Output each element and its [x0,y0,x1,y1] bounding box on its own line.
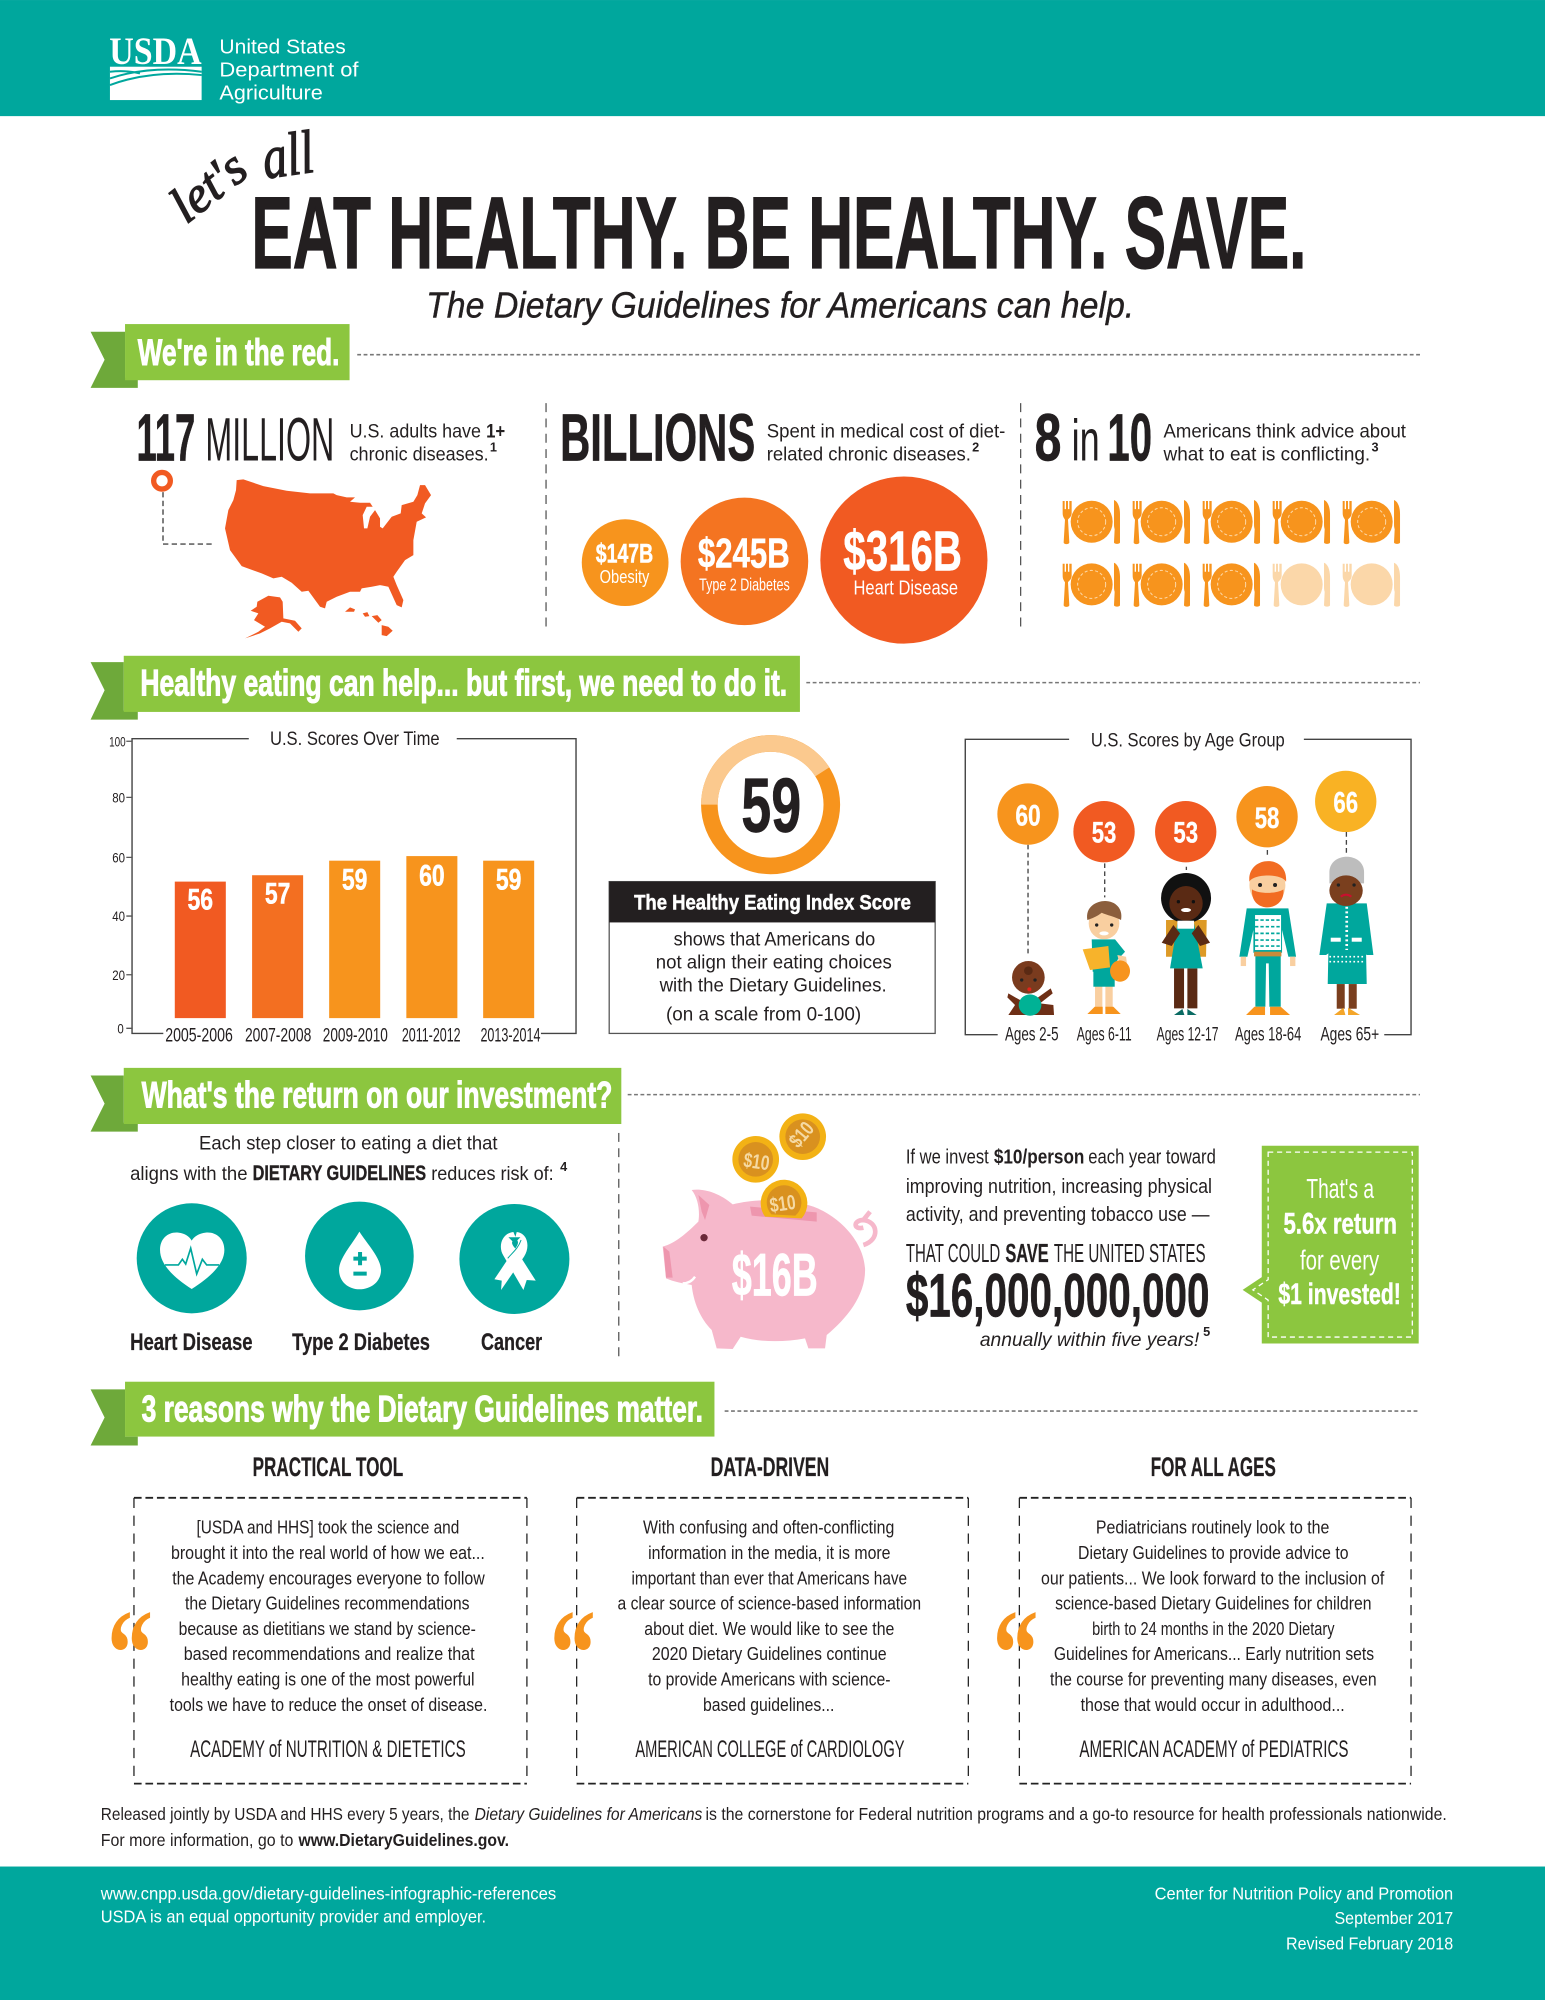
bar 2007-2008: 2007-2008 [245,1026,311,1047]
footer credits: Revised February 2018 [1286,1933,1453,1953]
bar 2013-2014: 2013-2014 [480,1026,541,1047]
score bubble 66: 66 [1333,787,1358,820]
stat: billions: 2 [972,440,979,455]
investment text: THAT COULD [906,1240,1000,1268]
icon labels: Heart Disease [130,1329,253,1356]
quote text: Pediatricians routinely look to the [1096,1517,1329,1538]
age 18-64 man [1239,861,1296,1015]
callout: 5.6x return: $1 invested! [1278,1278,1401,1311]
stat: 8 in 10: 10 [1107,402,1152,476]
coins: $10 [785,1118,819,1152]
risk reduction intro text: Each step closer to eating a diet that [199,1133,498,1155]
quote text: a clear source of science-based information [617,1592,921,1613]
bar chart: U.S. scores over time: U.S. Scores Over Time [270,729,440,750]
quote text: the Dietary Guidelines recommendations [185,1592,469,1613]
quote text: Dietary Guidelines to provide advice to [1078,1542,1349,1563]
quote text: science-based Dietary Guidelines for children [1055,1592,1371,1613]
coins: $10 [742,1149,771,1175]
script title: let's all [159,118,318,234]
stat: 8 in 10: in [1072,409,1100,474]
quote mark: “ [107,1586,153,1724]
footer references [100,1884,556,1927]
age labels [1005,1025,1379,1046]
bar chart: U.S. scores over time [109,729,576,1047]
callout: 5.6x return: for every [1300,1244,1379,1275]
risk reduction intro text: aligns with the [130,1163,248,1185]
quote text: those that would occur in adulthood... [1081,1694,1345,1715]
bubble: type 2 diabetes: $245B [698,530,790,577]
bar 2013-2014 [480,861,541,1047]
bubble: type 2 diabetes [681,498,808,625]
attribution: AMERICAN COLLEGE of CARDIOLOGY [635,1736,905,1763]
bar chart: U.S. scores over time: 100 [109,733,126,749]
age labels: Ages 6-11 [1077,1025,1132,1046]
department name [219,37,359,105]
bar 2009-2010: 2009-2010 [323,1026,388,1047]
score bubble 53 teen [1155,801,1216,862]
panel: for all ages [993,1452,1411,1784]
closing statement: is the cornerstone for Federal nutrition programs and a go-to resource for health professionals nationwide. [706,1804,1447,1824]
script title: let's all: all [258,118,318,193]
bar chart: U.S. scores over time: 0 [117,1020,124,1036]
panel: data-driven [550,1452,968,1784]
divider [545,403,547,630]
quote text: information in the media, it is more [648,1542,891,1563]
bubble: heart disease: Heart Disease [854,578,958,600]
age labels: Ages 12-17 [1157,1025,1219,1046]
stat: 8 in 10: 3 [1371,440,1379,455]
risk reduction intro text: 4 [560,1159,568,1174]
panel: healthy eating index score [609,882,935,1033]
bar 2005-2006 [165,882,233,1047]
quote text: 2020 Dietary Guidelines continue [652,1643,887,1664]
panel: healthy eating index score: (on a scale from 0-100) [666,1004,861,1026]
score bubble 58: 58 [1255,802,1279,835]
age 2-5 baby [1007,961,1054,1016]
callout: 5.6x return: That's a [1306,1173,1374,1204]
stat: billions: related chronic diseases. [767,444,971,466]
section heading: 3 reasons [91,1382,1420,1446]
quote text: to provide Americans with science- [648,1668,891,1689]
quote text: based guidelines... [703,1694,834,1715]
bar 2011-2012: 2011-2012 [402,1026,461,1047]
donut score 59: 59 [741,764,801,849]
age labels: Ages 18-64 [1235,1025,1302,1046]
footer credits: Center for Nutrition Policy and Promotion [1155,1884,1453,1904]
investment text: each year toward [1088,1147,1216,1169]
score bubble 60 [997,783,1059,845]
score bubble 53 child [1073,801,1135,862]
section heading: return on investment: What's the return on our investment? [142,1074,612,1115]
bar 2007-2008: 57 [265,877,290,910]
quote mark: “ [993,1586,1039,1724]
panel: healthy eating index score: not align their eating choices [656,951,892,973]
quote text: Guidelines for Americans... Early nutrition sets [1054,1643,1374,1664]
piggy bank illustration [663,1113,875,1349]
quote text: birth to 24 months in the 2020 Dietary [1092,1618,1335,1639]
age labels: Ages 2-5 [1005,1025,1059,1046]
panel: healthy eating index score: with the Dietary Guidelines. [659,974,887,996]
investment text: SAVE [1005,1240,1049,1268]
bubble: heart disease: $316B [843,519,962,582]
quote text: because as dietitians we stand by science- [179,1618,476,1639]
bar chart: U.S. scores over time: 80 [112,790,125,806]
footer band [0,1867,1545,2000]
department name: Department of [219,60,359,82]
age 65+ woman [1319,857,1373,1015]
bar chart: U.S. scores over time: 20 [112,967,125,983]
stat: billions [560,402,1005,644]
panel: for all ages: FOR ALL AGES [1151,1452,1276,1482]
department name: Agriculture [219,83,323,105]
quote text: based recommendations and realize that [184,1643,475,1664]
score bubble 58 [1236,786,1298,847]
panel: healthy eating index score: The Healthy Eating Index Score [634,890,911,915]
panel: healthy eating index score: shows that Americans do [674,928,875,950]
closing statement: Dietary Guidelines for Americans [475,1804,702,1824]
investment text: improving nutrition, increasing physical [906,1176,1212,1198]
risk reduction intro text [130,1133,568,1185]
pig body [663,1190,865,1349]
coin in slot [761,1180,807,1218]
section heading: return on investment [91,1068,1420,1132]
score bubble 53 teen: 53 [1173,817,1198,850]
bubble: obesity: $147B [596,539,653,569]
quote text: With confusing and often-conflicting [643,1517,894,1538]
icon: blood drop [305,1202,414,1310]
stat: 117 million: 1 [490,440,497,455]
coins [732,1113,826,1183]
bubble: obesity: Obesity [600,566,650,587]
panel: U.S. scores by age group [965,730,1411,1046]
quote text: the Academy encourages everyone to follow [172,1568,485,1589]
coin in slot: $10 [768,1191,797,1217]
stat: 117 million: U.S. adults have [350,421,481,443]
closing statement: www.DietaryGuidelines.gov. [298,1830,509,1850]
subtitle: The Dietary Guidelines for Americans can help. [426,286,1134,326]
stat: 117 million: MILLION [205,406,334,474]
investment text: activity, and preventing tobacco use — [906,1204,1210,1226]
quote text: important than ever that Americans have [632,1568,907,1589]
panel: U.S. scores by age group: U.S. Scores by Age Group [1091,730,1285,751]
investment text: If we invest [906,1147,989,1169]
quote text: [USDA and HHS] took the science and [196,1517,459,1538]
stat: 117 million [137,402,505,638]
stat: 8 in 10: what to eat is conflicting. [1163,444,1370,466]
bubble: obesity [582,519,669,606]
score bubble 60: 60 [1015,799,1041,832]
quote text [617,1517,921,1715]
bubble: type 2 diabetes: Type 2 Diabetes [699,575,790,595]
script title: let's all: let's [159,140,258,234]
attribution: ACADEMY of NUTRITION & DIETETICS [190,1736,466,1763]
stat: 117 million: 117 [137,402,195,476]
quote text: brought it into the real world of how we eat... [171,1542,485,1563]
stat: 117 million: 1+ [486,421,505,443]
department name: United States [219,37,346,59]
panel: practical tool: PRACTICAL TOOL [253,1452,403,1482]
section heading: Healthy eating can help [91,656,1420,720]
USDA logo: USDA [109,31,202,73]
panel: practical tool [107,1452,527,1784]
stat: 117 million: chronic diseases. [350,444,489,466]
footer credits [1155,1884,1453,1953]
investment text: THE UNITED STATES [1054,1240,1206,1268]
icon labels: Cancer [481,1329,543,1356]
bar chart: U.S. scores over time: 40 [112,908,125,924]
icons: risk areas [137,1202,569,1314]
bar chart: U.S. scores over time: 60 [112,849,125,865]
quote text: our patients... We look forward to the inclusion of [1041,1568,1385,1589]
quote text: the course for preventing many diseases, even [1050,1668,1377,1689]
panel: data-driven: DATA-DRIVEN [711,1452,829,1482]
icon labels [130,1329,543,1356]
bar 2011-2012 [402,856,461,1047]
callout: 5.6x return: 5.6x return [1283,1208,1397,1241]
quote text: about diet. We would like to see the [644,1618,894,1639]
closing statement: Released jointly by USDA and HHS every 5 years, the [101,1804,470,1824]
bar 2007-2008 [245,875,311,1047]
score bubble 53 child: 53 [1092,817,1116,850]
investment text: annually within five years! [980,1330,1200,1351]
bubble: heart disease [820,477,987,644]
bar 2009-2010 [323,861,388,1047]
map of the United States [154,472,431,638]
pig tail [856,1212,875,1245]
score bubble 66 [1315,771,1376,832]
divider [618,1133,620,1363]
icon: heart disease [137,1203,247,1313]
bar 2005-2006: 56 [188,884,213,917]
age labels: Ages 65+ [1320,1025,1379,1046]
quote mark: “ [550,1586,596,1724]
closing statement [101,1804,1447,1850]
age 6-11 child [1083,901,1130,1014]
plates pictogram [1063,500,1400,607]
stat: 8 in 10: Americans think advice about [1164,421,1406,443]
stat: billions: BILLIONS [560,402,755,476]
attribution: AMERICAN ACADEMY of PEDIATRICS [1079,1736,1349,1763]
investment text [906,1147,1216,1351]
footer references: www.cnpp.usda.gov/dietary-guidelines-infographic-references [100,1884,556,1904]
footer credits: September 2017 [1334,1908,1453,1928]
quote text [170,1517,487,1715]
age 12-17 girl [1161,873,1211,1015]
investment text: $16,000,000,000 [906,1262,1209,1330]
callout: 5.6x return [1243,1146,1419,1343]
donut score 59 [709,743,832,866]
stat: 8 in 10: 8 [1035,402,1061,476]
header band [0,0,1545,116]
section heading: We're in the red: We're in the red. [138,332,339,373]
piggy value: $16B [732,1242,818,1309]
bar 2005-2006: 2005-2006 [165,1026,233,1047]
bar 2011-2012: 60 [419,859,445,892]
investment text: 5 [1203,1324,1210,1339]
investment text: $10/person [994,1147,1084,1169]
divider [1020,403,1022,630]
USDA logo [109,31,202,100]
quote text: tools we have to reduce the onset of disease. [170,1694,487,1715]
footer references: USDA is an equal opportunity provider and employer. [101,1907,486,1927]
bar 2009-2010: 59 [342,863,367,896]
section heading: Healthy eating can help: Healthy eating can help... but first, we need to do it. [140,662,787,703]
risk reduction intro text: reduces risk of: [431,1163,554,1185]
quote text [1041,1517,1385,1715]
quote text: healthy eating is one of the most powerful [181,1668,475,1689]
icon labels: Type 2 Diabetes [292,1329,430,1356]
stat: billions: Spent in medical cost of diet- [767,421,1005,443]
section heading: 3 reasons: 3 reasons why the Dietary Guidelines matter. [142,1388,703,1429]
stat: 8 in 10 [1035,402,1406,607]
closing statement: For more information, go to [101,1830,293,1850]
risk reduction intro text: DIETARY GUIDELINES [253,1160,426,1185]
icon: awareness ribbon [459,1204,569,1314]
bar 2013-2014: 59 [496,863,521,896]
section heading: We're in the red [91,324,1420,388]
